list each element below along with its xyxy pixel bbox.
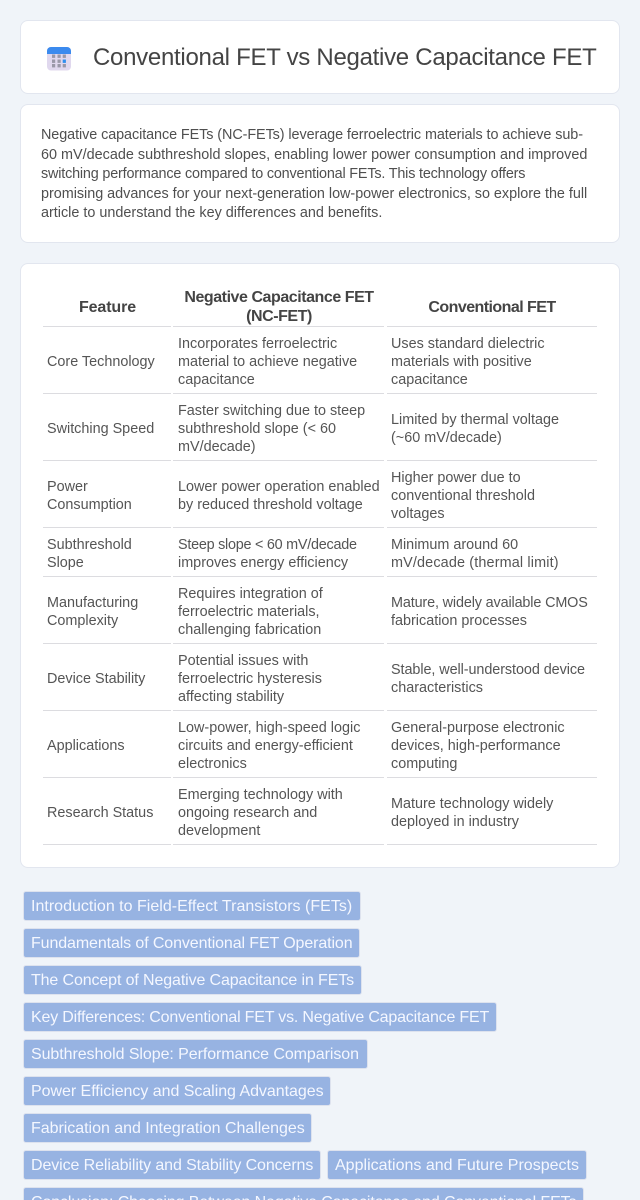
tag: introduction [23, 891, 361, 921]
intro paragraph: article to understand the key differences and benefits. [41, 205, 382, 221]
row: subthreshold slope: mV/decade (thermal limit) [391, 555, 559, 571]
row: applications: computing [391, 756, 457, 772]
row: switching speed: subthreshold slope (< 60 [178, 421, 336, 437]
row: research status: Mature technology widely [391, 796, 553, 812]
row: subthreshold slope: Subthreshold [47, 537, 132, 553]
table header: NC-FET: (NC-FET) [246, 308, 312, 325]
row: power consumption: Lower power operation enabled [178, 479, 380, 495]
row: core technology [47, 336, 545, 388]
row: manufacturing complexity: Manufacturing [47, 595, 138, 611]
row: switching speed: Faster switching due to steep [178, 403, 365, 419]
row: power consumption: voltages [391, 506, 445, 522]
row: subthreshold slope [47, 537, 559, 571]
row: switching speed: mV/decade) [178, 439, 256, 455]
row: power consumption: Higher power due to [391, 470, 521, 486]
row: applications: Low-power, high-speed logic [178, 720, 360, 736]
comparison table card [20, 263, 620, 868]
row: power consumption: conventional threshold [391, 488, 535, 504]
row: manufacturing complexity: Mature, widely available CMOS [391, 595, 588, 611]
row: device stability: ferroelectric hysteresis [178, 671, 322, 687]
row: core technology: Core Technology [47, 354, 155, 370]
row: applications: electronics [178, 756, 247, 772]
row: manufacturing complexity: challenging fabrication [178, 622, 321, 638]
tag: introduction: Introduction to Field-Effect Transistors (FETs) [31, 898, 352, 915]
tag: conclusion [23, 1187, 584, 1200]
row: core technology: capacitance [178, 372, 255, 388]
row: subthreshold slope: Slope [47, 555, 84, 571]
row: device stability: affecting stability [178, 689, 284, 705]
tag: subthreshold slope: Subthreshold Slope: Performance Comparison [31, 1046, 359, 1063]
intro paragraph: 60 mV/decade subthreshold slopes, enabling lower power consumption and improved [41, 147, 587, 163]
row: subthreshold slope: Minimum around 60 [391, 537, 518, 553]
row: manufacturing complexity: Requires integration of [178, 586, 323, 602]
row: research status: ongoing research and [178, 805, 317, 821]
row: switching speed: (~60 mV/decade) [391, 430, 502, 446]
tag: concept of negative capacitance [23, 965, 362, 995]
icon: calendar [47, 47, 71, 70]
row: applications: devices, high-performance [391, 738, 561, 754]
tag: fundamentals: Fundamentals of Conventional FET Operation [31, 935, 352, 952]
tag: fabrication: Fabrication and Integration Challenges [31, 1120, 305, 1137]
header card [20, 20, 620, 94]
tag: power efficiency [23, 1076, 331, 1106]
row: manufacturing complexity: fabrication processes [391, 613, 527, 629]
tag: key differences [23, 1002, 497, 1032]
row: core technology: materials with positive [391, 354, 532, 370]
row: device stability: characteristics [391, 680, 483, 696]
tag: applications [327, 1150, 587, 1180]
row: applications: General-purpose electronic [391, 720, 565, 736]
intro text card [20, 104, 620, 243]
row: core technology: Incorporates ferroelectric [178, 336, 337, 352]
row: power consumption: Power [47, 479, 88, 495]
tag: power efficiency: Power Efficiency and Scaling Advantages [31, 1083, 324, 1100]
intro paragraph: Negative capacitance FETs (NC-FETs) leverage ferroelectric materials to achieve sub- [41, 127, 583, 143]
row: core technology: material to achieve negative [178, 354, 357, 370]
table header: feature: Feature [79, 299, 136, 316]
table header: NC-FET [184, 289, 374, 325]
row: switching speed: Limited by thermal voltage [391, 412, 559, 428]
table header: conventional FET: Conventional FET [428, 299, 556, 316]
row: switching speed [47, 403, 559, 455]
row: subthreshold slope: improves energy efficiency [178, 555, 348, 571]
row: subthreshold slope: Steep slope < 60 mV/decade [178, 537, 357, 553]
row: device stability [47, 653, 585, 705]
row: core technology: capacitance [391, 372, 468, 388]
tag: fabrication [23, 1113, 312, 1143]
table header: NC-FET: Negative Capacitance FET [184, 289, 374, 306]
row: manufacturing complexity [47, 586, 588, 638]
row: applications: Applications [47, 738, 125, 754]
row: device stability: Stable, well-understood device [391, 662, 585, 678]
tag: reliability [23, 1150, 321, 1180]
row: device stability: Device Stability [47, 671, 145, 687]
row: research status: development [178, 823, 260, 839]
row: research status [47, 787, 554, 839]
row: device stability: Potential issues with [178, 653, 308, 669]
row: power consumption: Consumption [47, 497, 132, 513]
tag: key differences: Key Differences: Conventional FET vs. Negative Capacitance FET [31, 1009, 489, 1026]
intro paragraph: switching performance compared to conventional FETs. This technology offers [41, 166, 525, 182]
row: manufacturing complexity: ferroelectric materials, [178, 604, 320, 620]
row: manufacturing complexity: Complexity [47, 613, 118, 629]
title: Conventional FET vs Negative Capacitance FET [93, 44, 596, 71]
row: applications [47, 720, 565, 772]
intro paragraph: promising advances for your next-generation low-power electronics, so explore the full [41, 186, 587, 202]
tag: fundamentals [23, 928, 360, 958]
tag: reliability: Device Reliability and Stability Concerns [31, 1157, 313, 1174]
row: applications: circuits and energy-efficient [178, 738, 353, 754]
row: power consumption [47, 470, 535, 522]
intro paragraph [41, 127, 587, 221]
row: research status: Research Status [47, 805, 153, 821]
row: power consumption: by reduced threshold voltage [178, 497, 363, 513]
row: switching speed: Switching Speed [47, 421, 154, 437]
row: research status: deployed in industry [391, 814, 519, 830]
tag: applications: Applications and Future Prospects [335, 1157, 579, 1174]
tag: subthreshold slope [23, 1039, 368, 1069]
row: research status: Emerging technology with [178, 787, 343, 803]
tag: concept of negative capacitance: The Concept of Negative Capacitance in FETs [31, 972, 354, 989]
row: core technology: Uses standard dielectric [391, 336, 545, 352]
